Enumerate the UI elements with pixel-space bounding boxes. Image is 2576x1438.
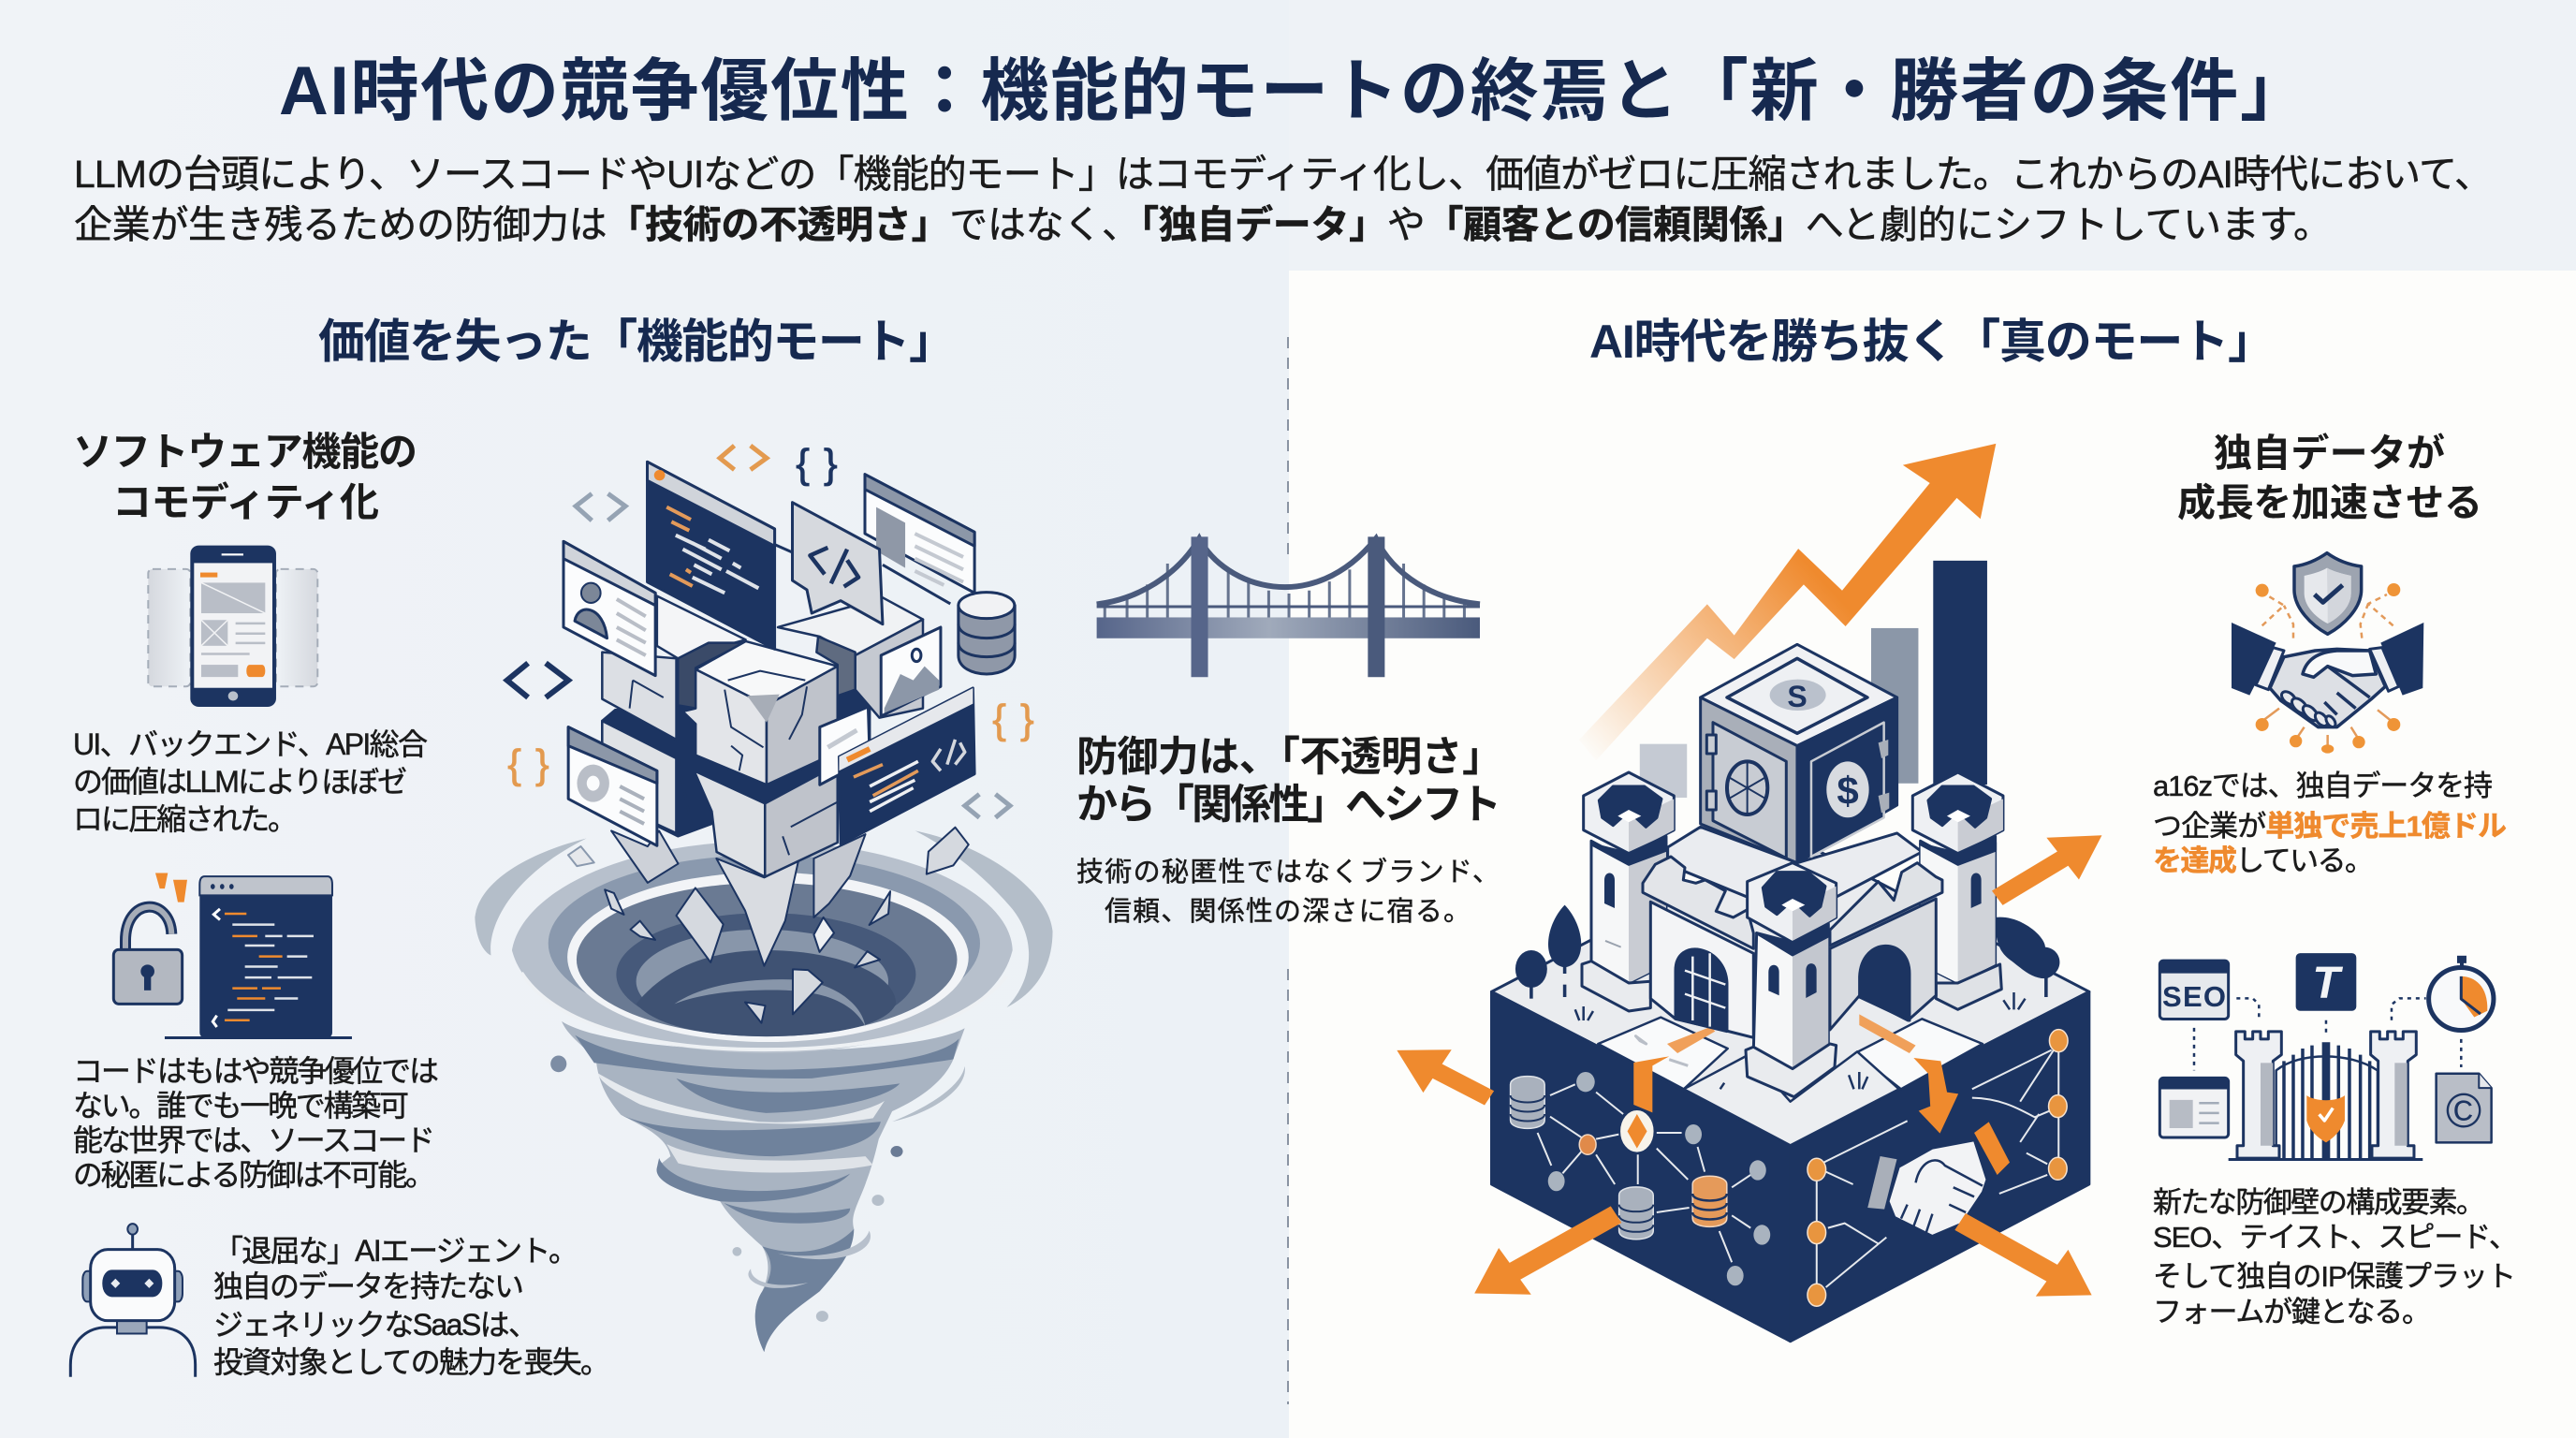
text: a16z data: つ企業が単独で売上1億ドル bbox=[2153, 810, 2507, 843]
text: boring AI agents bbox=[213, 1234, 610, 1379]
growth arrow bbox=[1579, 444, 1996, 761]
text: code is no longer an advantage: ない。誰でも一晩で構築可 bbox=[73, 1089, 409, 1123]
arrows radiating bbox=[1397, 835, 2101, 1297]
icon: robot agent bbox=[70, 1224, 196, 1377]
icon: handshake with shield bbox=[2232, 553, 2423, 754]
text: a16z data: を達成している。 bbox=[2153, 844, 2374, 877]
icon: phone with wireframe bbox=[148, 546, 317, 707]
vortex funnel bbox=[475, 830, 1053, 1352]
castle bbox=[1582, 644, 2003, 1097]
growth bars bbox=[1640, 561, 1987, 798]
icon: suspension bridge bbox=[1097, 536, 1480, 677]
data island base bbox=[1491, 836, 2089, 1342]
floating shards bbox=[568, 828, 969, 1023]
text: code is no longer an advantage bbox=[73, 1054, 439, 1192]
illustration: tornado swallowing software blocks bbox=[475, 441, 1053, 1352]
code braces bbox=[507, 441, 1048, 787]
text: new moat components bbox=[2153, 1186, 2518, 1328]
safe vault bbox=[1701, 644, 1897, 863]
icon: SEO, taste, speed and IP gate bbox=[2159, 953, 2494, 1159]
code braces: {} bbox=[507, 741, 564, 787]
subheading: commoditization: ソフトウェア機能の bbox=[73, 430, 417, 474]
left and right towers bbox=[1582, 772, 1674, 1011]
network and data on island bbox=[1511, 1014, 2068, 1306]
icon labels: T bbox=[2312, 959, 2343, 1008]
code chevrons bbox=[507, 446, 1010, 817]
text: code is no longer an advantage: コードはもはや競争優位では bbox=[73, 1054, 439, 1088]
subheading: proprietary data: 成長を加速させる bbox=[2177, 481, 2482, 524]
subheading: proprietary data bbox=[2177, 432, 2482, 524]
text: UI commoditization: UI、バックエンド、API総合 bbox=[73, 727, 428, 761]
text: boring AI agents: 投資対象としての魅力を喪失。 bbox=[213, 1345, 610, 1379]
text: new moat components: 新たな防御壁の構成要素。 bbox=[2153, 1186, 2485, 1219]
text: boring AI agents: 独自のデータを持たない bbox=[213, 1269, 524, 1303]
text: code is no longer an advantage: の秘匿による防御は不可能。 bbox=[73, 1158, 435, 1192]
text: UI commoditization: ロに圧縮された。 bbox=[73, 802, 298, 836]
subheading: proprietary data: 独自データが bbox=[2214, 432, 2445, 475]
icon labels bbox=[2162, 959, 2481, 1138]
vault labels: $ bbox=[1837, 769, 1859, 813]
text: shift in defensibility: 技術の秘匿性ではなくブランド、 bbox=[1076, 857, 1500, 888]
icon labels: SEO bbox=[2162, 980, 2226, 1013]
front walls and gates bbox=[1643, 857, 1942, 1037]
text: UI commoditization: の価値はLLMによりほぼゼ bbox=[73, 765, 407, 799]
text: new moat components: SEO、テイスト、スピード、 bbox=[2153, 1221, 2518, 1254]
vault labels bbox=[1787, 680, 1859, 813]
icon labels: © bbox=[2446, 1084, 2481, 1138]
floating code windows bbox=[564, 462, 1015, 845]
text: boring AI agents: 「退屈な」AIエージェント。 bbox=[213, 1234, 578, 1268]
subheading: commoditization bbox=[73, 430, 417, 524]
illustration: castle on data island bbox=[1397, 444, 2101, 1342]
heading: left section: 価値を失った「機能的モート」 bbox=[318, 315, 956, 368]
intro text block bbox=[74, 153, 2493, 246]
front tower bbox=[1746, 863, 1837, 1097]
text: shift in defensibility: 信頼、関係性の深さに宿る。 bbox=[1105, 896, 1471, 927]
text: new moat components: そして独自のIP保護プラット bbox=[2153, 1260, 2516, 1293]
intro text block: LLMの台頭により、ソースコードやUIなどの「機能的モート」はコモディティ化し、価値がゼロに圧縮されました。これからのAI時代において、 bbox=[74, 153, 2493, 196]
heading: right section: AI時代を勝ち抜く「真のモート」 bbox=[1589, 315, 2275, 368]
text: UI commoditization bbox=[73, 727, 428, 836]
icon: open lock and code window bbox=[113, 873, 352, 1038]
text: a16z data: a16zでは、独自データを持 bbox=[2153, 770, 2493, 802]
text: shift in defensibility: 防御力は、「不透明さ」 bbox=[1076, 734, 1503, 780]
text: shift in defensibility: から「関係性」へシフト bbox=[1076, 782, 1501, 828]
text: shift in defensibility bbox=[1076, 734, 1503, 927]
text: new moat components: フォームが鍵となる。 bbox=[2153, 1296, 2431, 1328]
intro text block: 企業が生き残るための防御力は「技術の不透明さ」ではなく、「独自データ」や「顧客との信頼関係」へと劇的にシフトしています。 bbox=[74, 203, 2332, 246]
text: code is no longer an advantage: 能な世界では、ソースコード bbox=[73, 1123, 435, 1157]
title: AI時代の競争優位性：機能的モートの終焉と「新・勝者の条件」 bbox=[279, 53, 2308, 129]
panel: right white background bbox=[1289, 271, 2576, 1438]
code braces: {} bbox=[992, 697, 1048, 742]
trees bbox=[1515, 905, 2059, 999]
text: boring AI agents: ジェネリックなSaaSは、 bbox=[213, 1308, 538, 1342]
subheading: commoditization: コモディティ化 bbox=[112, 480, 379, 524]
cracked cube blocks bbox=[602, 596, 923, 877]
text: a16z data bbox=[2153, 770, 2507, 877]
vault labels: S bbox=[1787, 680, 1808, 713]
code braces: {} bbox=[796, 441, 852, 487]
